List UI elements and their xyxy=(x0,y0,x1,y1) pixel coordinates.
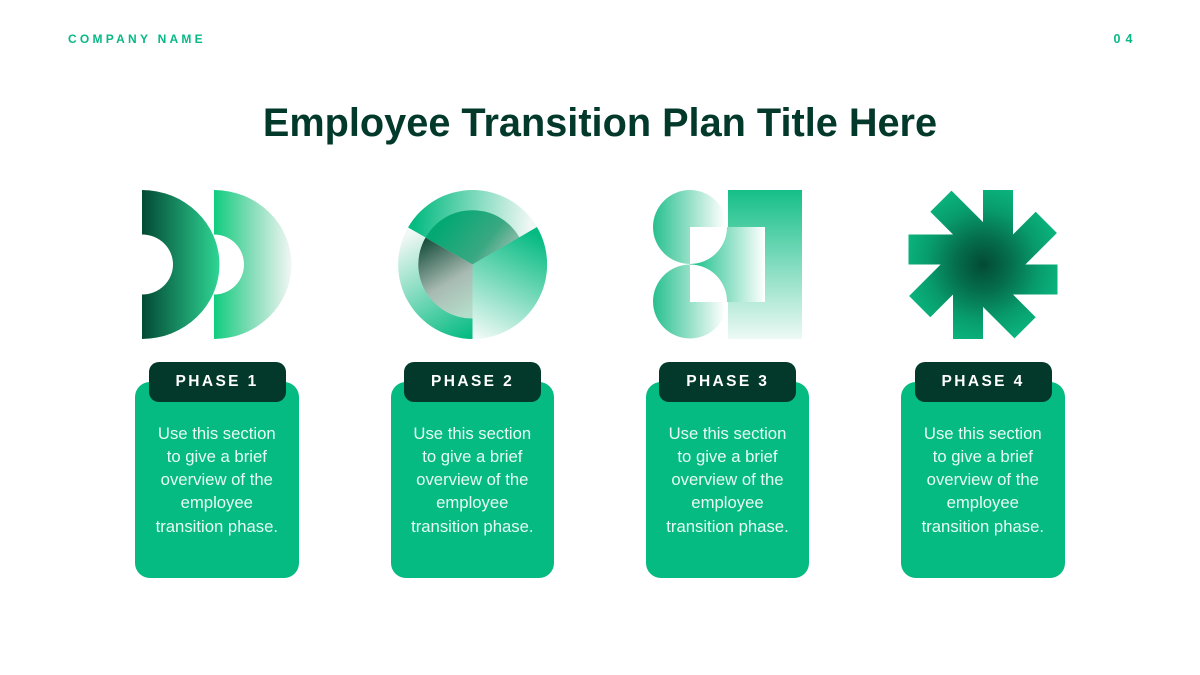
panel: phase 4 xyxy=(901,362,1065,578)
icon: segmented circle xyxy=(398,190,547,339)
phase 2 label: PHASE 2 xyxy=(431,373,514,390)
phase 3 text: employee xyxy=(691,493,764,512)
icon: eight-arm pinwheel star xyxy=(908,190,1058,339)
phase 4 text: transition phase. xyxy=(922,516,1044,536)
phase 2 text: Use this section xyxy=(413,424,531,442)
phase 2 card xyxy=(390,382,554,578)
phase 1 label: PHASE 1 xyxy=(176,373,259,390)
phase 3 text: to give a brief xyxy=(677,447,778,466)
phase 4 text xyxy=(922,424,1044,536)
phase 4 text: overview of the xyxy=(927,470,1039,489)
panel: phase 1 xyxy=(135,362,299,578)
phase 2 text: overview of the xyxy=(416,470,528,489)
phase 1 card xyxy=(135,382,299,578)
phase 2 text: to give a brief xyxy=(422,447,522,466)
phase 4 text: Use this section xyxy=(924,424,1042,442)
phase 4 text: to give a brief xyxy=(933,447,1033,466)
panel: phase 3 xyxy=(646,362,809,578)
phase 3 card xyxy=(646,382,809,578)
phase 1 text: transition phase. xyxy=(156,516,278,536)
phase 4 label xyxy=(915,362,1052,402)
phase 2 text: transition phase. xyxy=(411,516,534,536)
page number: 04 xyxy=(1114,32,1137,46)
phase 2 text: employee xyxy=(436,493,508,512)
phase 3 text: transition phase. xyxy=(666,516,789,536)
company name: COMPANY NAME xyxy=(68,32,206,46)
phase 4 label: PHASE 4 xyxy=(942,373,1025,390)
phase 1 text: overview of the xyxy=(161,470,273,489)
icon: two half rings xyxy=(142,190,291,339)
phase 1 text: employee xyxy=(181,493,253,512)
phase 3 text: Use this section xyxy=(669,424,786,442)
phase 1 text xyxy=(156,424,278,536)
title: Employee Transition Plan Title Here xyxy=(263,101,937,145)
panel: phase 2 xyxy=(391,362,554,578)
phase 4 card xyxy=(901,382,1065,578)
phase 3 label: PHASE 3 xyxy=(686,373,769,390)
phase 3 label xyxy=(659,362,796,402)
phase 4 text: employee xyxy=(947,493,1019,512)
icon: circles and squares xyxy=(653,190,802,339)
phase 1 label xyxy=(149,362,286,402)
phase 3 text: overview of the xyxy=(671,470,784,489)
phase 1 text: Use this section xyxy=(158,424,276,442)
phase 2 label xyxy=(404,362,541,402)
phase 1 text: to give a brief xyxy=(167,447,267,466)
phase 2 text xyxy=(411,424,534,536)
phase 3 text xyxy=(666,424,789,536)
